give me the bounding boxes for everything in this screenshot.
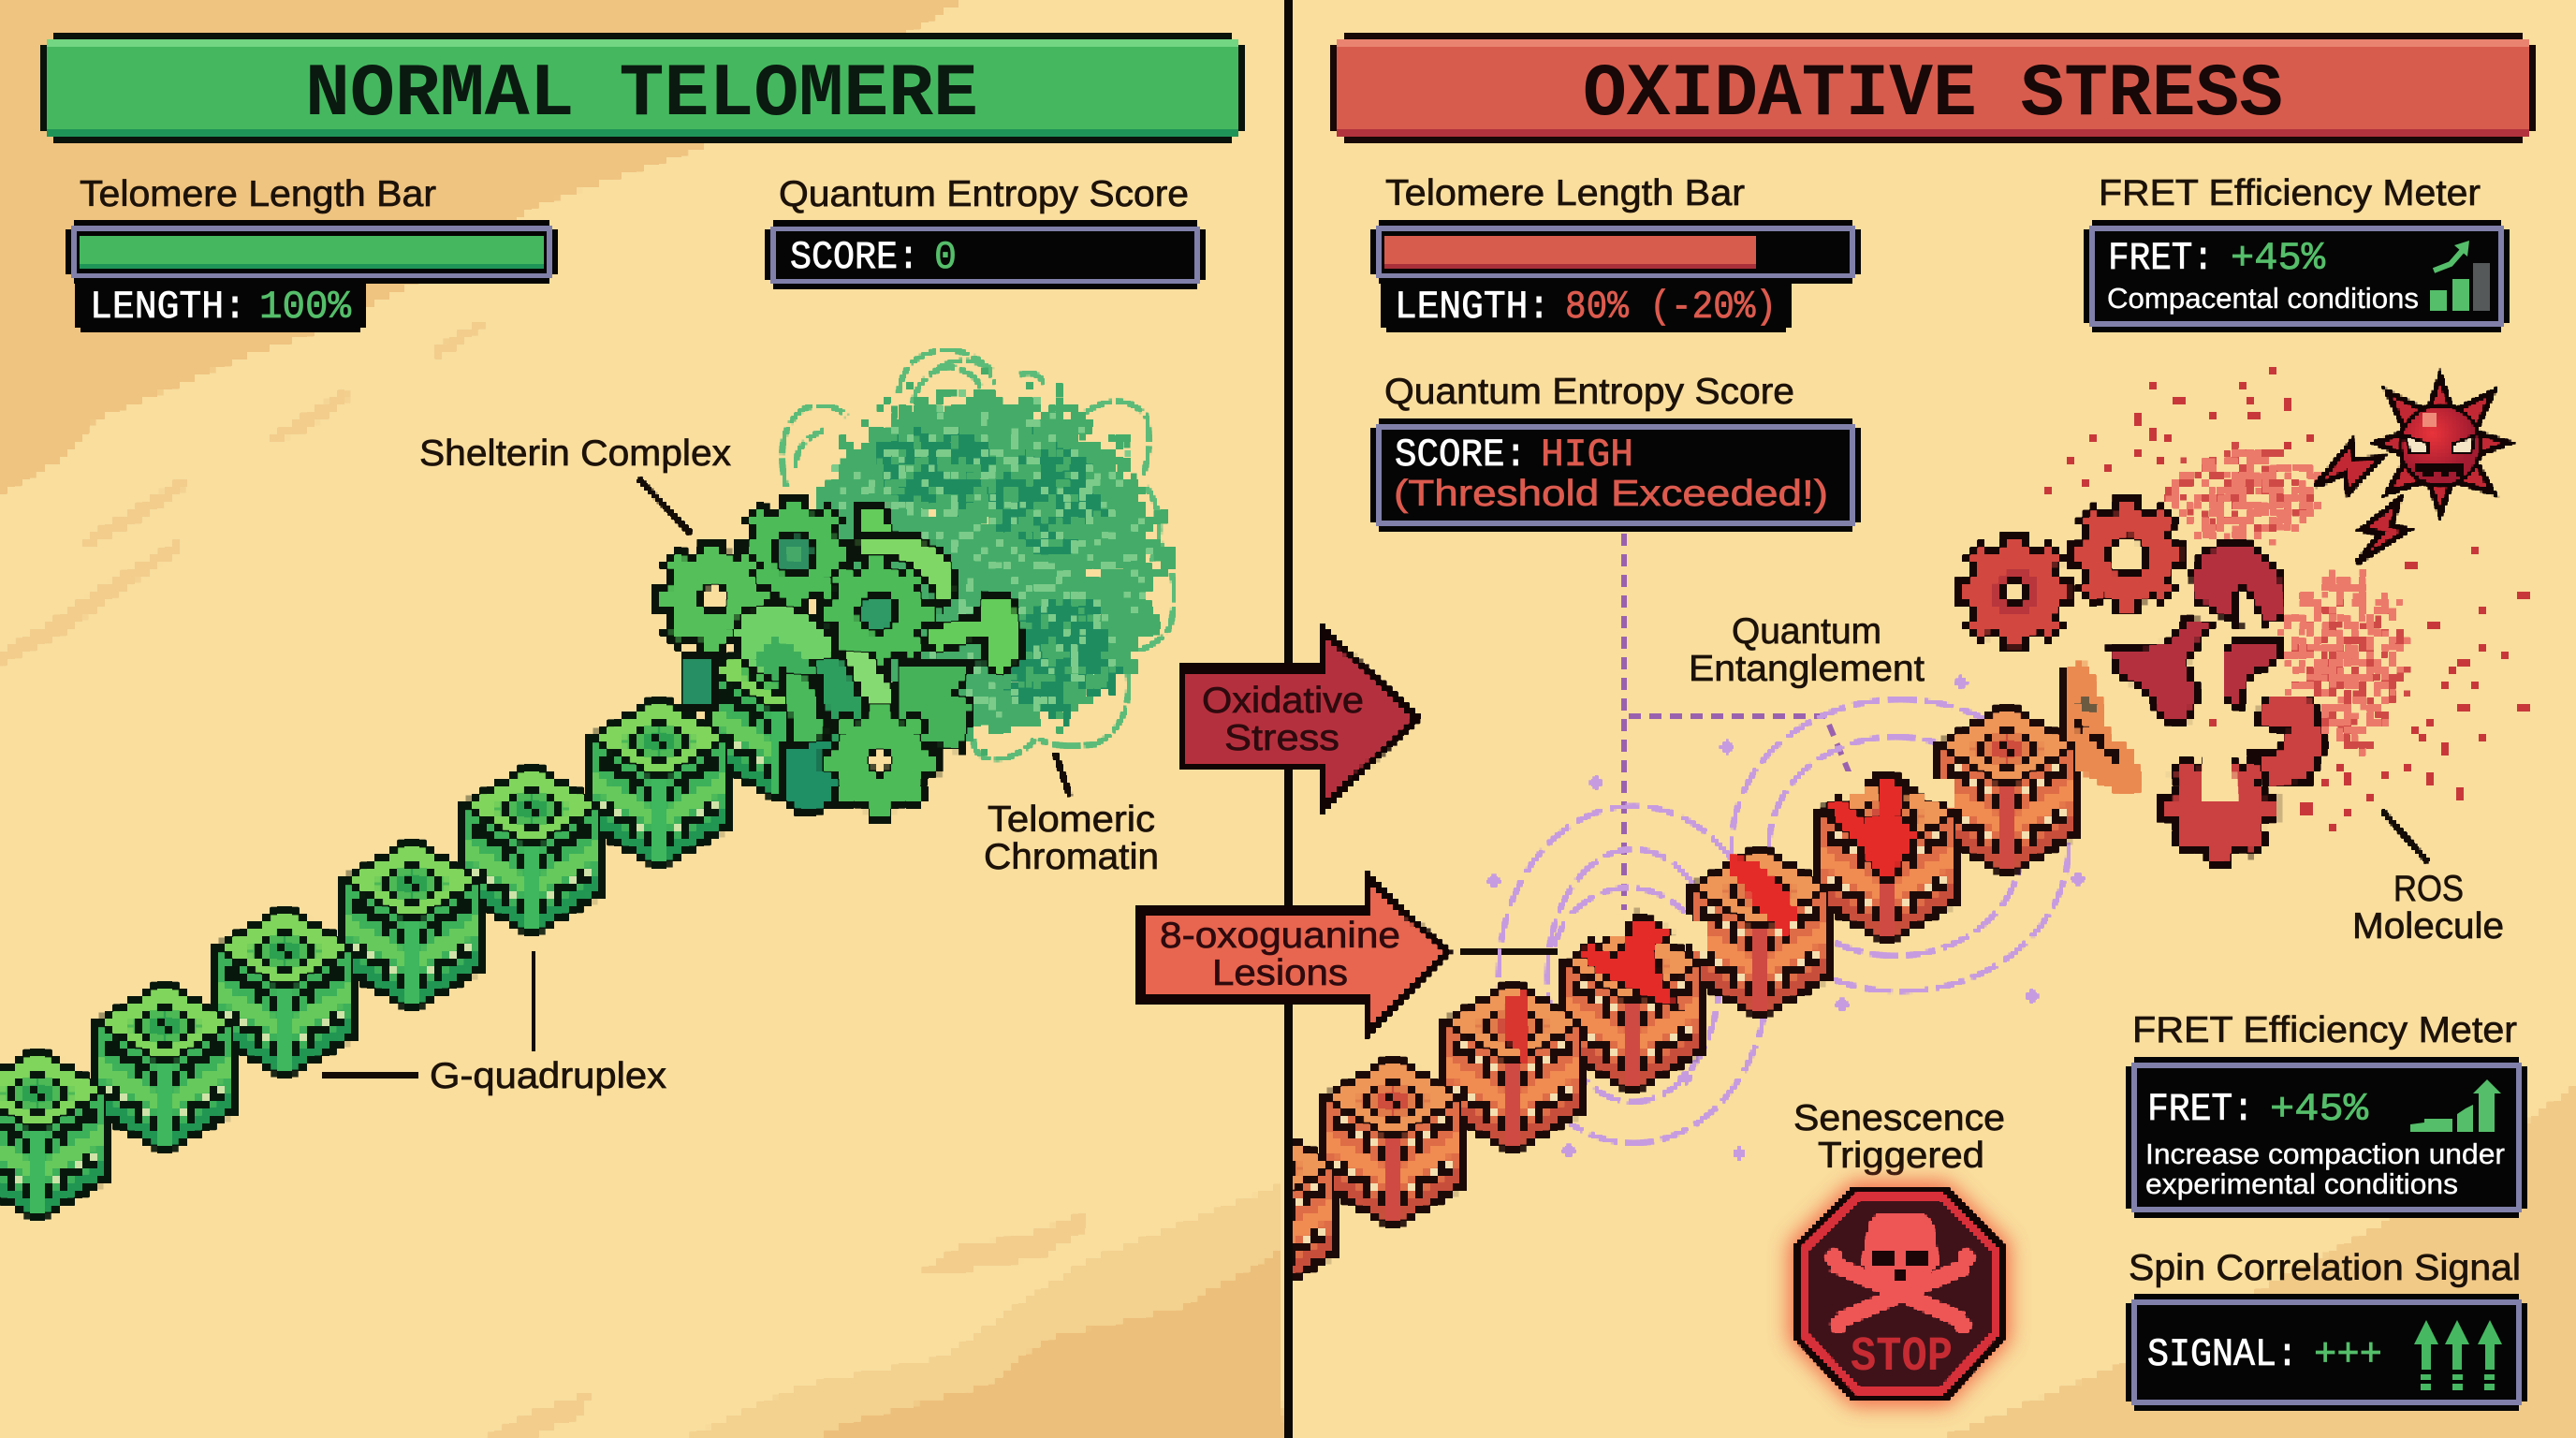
icon: three up arrows	[2414, 1320, 2502, 1390]
fret meter box top	[2084, 220, 2510, 332]
signal box: SIGNAL:	[2147, 1332, 2298, 1377]
g-quadruplex cube 3	[213, 903, 356, 1080]
damaged cube 2	[1442, 978, 1584, 1155]
stop sign	[1789, 1181, 2010, 1406]
fret meter box top: +45%	[2231, 236, 2326, 281]
quantum entanglement rings and sparkles	[1486, 675, 2086, 1161]
fret meter box bottom	[2126, 1057, 2527, 1218]
panel: normal telomere	[0, 33, 1245, 1223]
score box: high: SCORE:	[1395, 433, 1527, 477]
central divider	[1284, 0, 1293, 1438]
shelterin right cross	[899, 661, 973, 749]
readout: length 80%: 80% (-20%)	[1565, 285, 1777, 330]
damaged cube 0	[1194, 1121, 1337, 1298]
leader lines: left panel	[322, 478, 1070, 1076]
g-quadruplex cube 2	[94, 978, 236, 1155]
fret meter box top: Compacental conditions	[2107, 282, 2419, 315]
score box: high: (Threshold Exceeded!)	[1394, 474, 1828, 514]
telomere length bar 100%	[66, 220, 558, 284]
broken shelterin gears	[1958, 499, 2324, 864]
broken cube fragment	[2065, 660, 2142, 796]
readout: length 80%: LENGTH:	[1395, 285, 1550, 330]
arrow: 8-oxoguanine lesions: 8-oxoguanine	[1160, 916, 1400, 956]
label: senescence triggered: Senescence	[1793, 1098, 2005, 1138]
label: quantum entanglement: Entanglement	[1689, 649, 1925, 689]
readout: length 100%: 100%	[259, 285, 352, 330]
readout: length 100%	[75, 279, 366, 332]
fret meter box top: FRET:	[2108, 236, 2214, 281]
damaged cube 3	[1561, 913, 1708, 1095]
label: ros molecule: Molecule	[2352, 906, 2504, 946]
pixel art: right panel	[1194, 367, 2527, 1298]
damaged cube 4	[1689, 844, 1831, 1020]
signal box	[2126, 1294, 2527, 1411]
icon: rising bars and arrow	[2430, 241, 2490, 311]
shelterin gear d	[823, 704, 937, 818]
shelterin gear c	[821, 555, 935, 669]
label: g-quadruplex: G-quadruplex	[430, 1056, 667, 1096]
shelterin lobes	[783, 672, 824, 745]
leader lines: right panel	[1461, 811, 2428, 952]
g-quadruplex cube 4	[341, 836, 483, 1013]
label: quantum entanglement	[1689, 611, 1925, 689]
pixel art: left panel	[0, 370, 1182, 1223]
label: senescence triggered: Triggered	[1818, 1136, 1984, 1176]
label: telomeric chromatin: Telomeric	[988, 800, 1155, 840]
ros spikes	[2377, 377, 2508, 513]
title banner: oxidative stress: OXIDATIVE STRESS	[1583, 52, 2283, 138]
signal box: +++	[2314, 1332, 2382, 1377]
label: quantum entropy score: Quantum Entropy Score	[1384, 372, 1794, 412]
arrow: oxidative stress: Stress	[1224, 718, 1339, 758]
label: senescence triggered	[1793, 1098, 2005, 1176]
label: quantum entanglement: Quantum	[1732, 611, 1881, 652]
shelterin complex	[656, 496, 1024, 818]
label: telomere length bar: Telomere Length Bar	[1385, 173, 1745, 213]
shelterin top lobe	[856, 506, 894, 538]
label: quantum entropy score: Quantum Entropy Score	[779, 174, 1189, 214]
shelterin gear b	[738, 496, 852, 610]
label: fret efficiency meter top: FRET Efficiency Meter	[2099, 173, 2481, 213]
score box: 0: SCORE:	[790, 235, 919, 280]
shelterin mound subunit	[733, 602, 835, 682]
icon: crossbones	[1833, 1264, 1968, 1320]
score box: 0: 0	[934, 235, 957, 280]
title banner: normal telomere	[40, 33, 1245, 143]
score box: high: HIGH	[1541, 433, 1633, 477]
shelterin gear a	[656, 541, 770, 655]
ros bolt 2	[2357, 500, 2408, 563]
fret meter label bottom: FRET Efficiency Meter	[2132, 1010, 2517, 1050]
label: spin correlation signal: Spin Correlation Signal	[2129, 1248, 2521, 1288]
fret meter box bottom: experimental conditions	[2145, 1167, 2458, 1200]
icon: skull	[1861, 1212, 1939, 1292]
stop sign: STOP	[1851, 1329, 1953, 1385]
lesion 2	[1727, 857, 1802, 936]
fret meter box bottom: Increase compaction under	[2145, 1137, 2505, 1170]
telomere cube 6	[588, 694, 730, 871]
arrow: 8-oxoguanine lesions	[1141, 878, 1446, 1031]
arrow: 8-oxoguanine lesions: Lesions	[1212, 953, 1348, 993]
shelterin hammer subunit	[927, 592, 1024, 676]
panel: oxidative stress	[1194, 33, 2536, 1411]
chromatin loose loops	[783, 350, 1174, 759]
title banner: normal telomere: NORMAL TELOMERE	[305, 52, 978, 138]
damaged cube 6	[1936, 701, 2078, 878]
telomere length bar 80%	[1370, 220, 1861, 284]
title banner: oxidative stress	[1330, 33, 2536, 143]
lesion 3	[1825, 775, 1919, 880]
red fragments	[2193, 541, 2284, 625]
fret meter box bottom: +45%	[2270, 1087, 2369, 1132]
red gear 2	[2071, 499, 2185, 613]
damaged cube 5	[1816, 769, 1958, 946]
score box: 0	[765, 220, 1206, 289]
arrow: oxidative stress: Oxidative	[1202, 681, 1364, 721]
score box: high	[1370, 418, 1861, 532]
red gear 1	[1958, 536, 2072, 650]
readout: length 100%: LENGTH:	[90, 285, 246, 330]
label: shelterin complex: Shelterin Complex	[419, 433, 732, 474]
entanglement dashed connector	[1624, 534, 1850, 910]
lesion 1	[1577, 914, 1680, 1009]
ros face	[2400, 405, 2481, 486]
ros bolt 1	[2316, 443, 2380, 492]
red gear broken	[2162, 741, 2276, 864]
ros molecule	[2316, 377, 2508, 563]
fret meter box bottom: FRET:	[2147, 1087, 2254, 1132]
telomere cube 7, behind complex	[708, 626, 850, 803]
label: ros molecule	[2352, 869, 2504, 946]
label: ros molecule: ROS	[2393, 869, 2464, 909]
red specks	[2042, 367, 2527, 830]
label: telomere length bar: Telomere Length Bar	[80, 174, 436, 214]
red dust clouds	[2164, 442, 2411, 756]
icon: stair bars and up arrow	[2410, 1079, 2501, 1132]
shelterin arc	[855, 536, 958, 609]
label: telomeric chromatin: Chromatin	[984, 837, 1159, 877]
damaged cube 1	[1322, 1053, 1464, 1230]
label: telomeric chromatin	[984, 800, 1159, 877]
g-quadruplex cube 1	[0, 1046, 109, 1223]
arrow: oxidative stress	[1183, 630, 1416, 808]
telomeric chromatin cloud	[780, 370, 1182, 754]
g-quadruplex cube 5	[461, 761, 603, 938]
readout: length 80%	[1381, 280, 1792, 332]
